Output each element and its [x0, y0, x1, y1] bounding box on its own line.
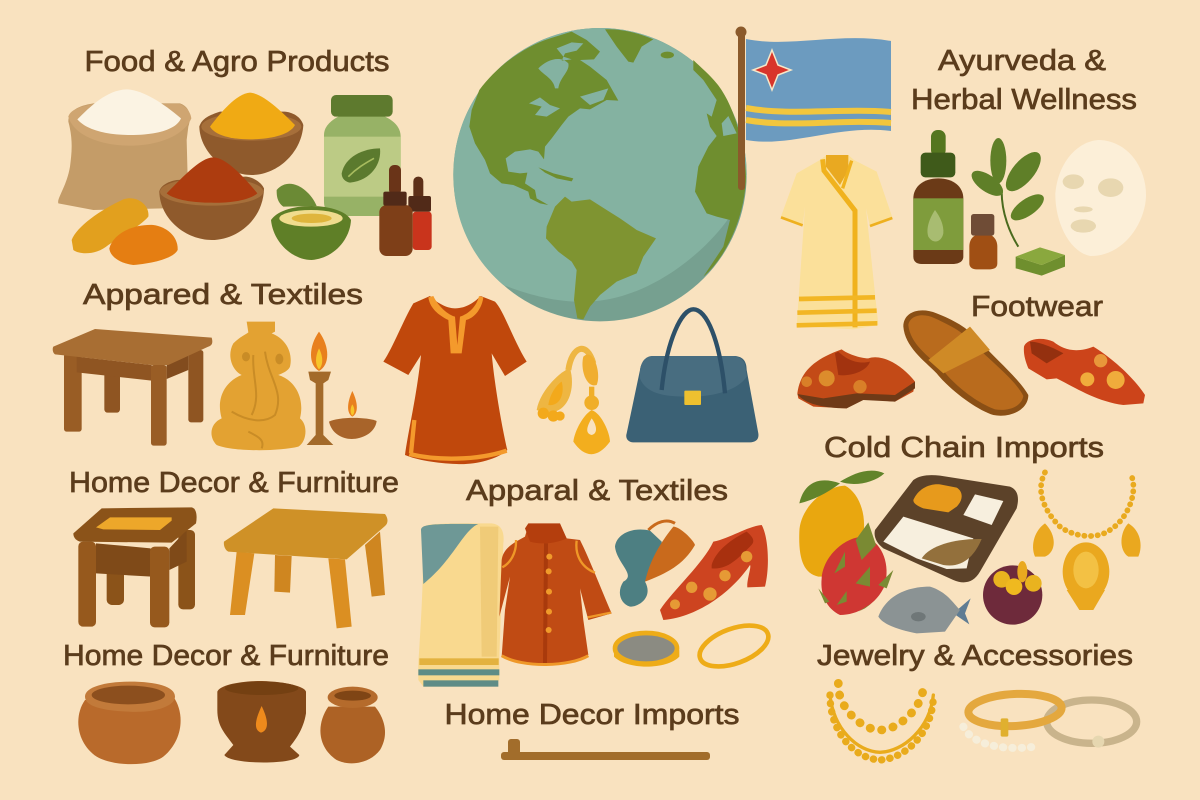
- icon: turmeric roots: [72, 198, 178, 265]
- icon: herb sprig: [968, 138, 1048, 247]
- icon: brown sandal: [903, 310, 1028, 416]
- icon: small clay jar: [320, 687, 385, 763]
- icon: folded saree: [418, 523, 504, 687]
- icon: lime half with leaf: [271, 184, 351, 260]
- Iceland: [661, 52, 674, 58]
- Europe and Africa landmass: [693, 60, 746, 277]
- icon: gold ring bangle: [694, 617, 774, 675]
- icon: mango: [799, 471, 884, 577]
- icon: red floral heels: [660, 525, 768, 620]
- heading: Apparal & Textiles: Apparal & Textiles: [466, 475, 728, 507]
- icon: bowl of turmeric: [199, 93, 303, 175]
- heading: Food & Agro Products: Food & Agro Products: [84, 46, 390, 78]
- icon: herbal jar: [324, 95, 401, 216]
- icon: gold earring: [537, 349, 610, 454]
- icon: gold necklace with pendant: [1033, 472, 1141, 610]
- icon: candle stand: [307, 332, 333, 445]
- icon: wooden table: [53, 329, 212, 446]
- icon: red kurta: [383, 296, 527, 464]
- South America landmass: [546, 197, 656, 319]
- icon: small amber bottle: [969, 214, 997, 269]
- icon: gold bead necklace: [830, 683, 933, 760]
- heading: Ayurveda & Herbal Wellness: Herbal Wellness: [911, 84, 1137, 116]
- icon: grey fish: [878, 587, 971, 633]
- heading: Footwear: Footwear: [971, 291, 1103, 323]
- heading: Ayurveda & Herbal Wellness: [911, 45, 1137, 116]
- icon: Ganesha statue: [211, 322, 305, 450]
- heading: Cold Chain Imports: Cold Chain Imports: [824, 432, 1104, 464]
- icon: blue handbag: [626, 309, 758, 442]
- heading: Ayurveda & Herbal Wellness: Ayurveda &: [938, 45, 1106, 77]
- icon: rice sack: [58, 89, 191, 210]
- icon: flag of Aruba on pole: [736, 26, 891, 190]
- icon: mangosteen: [983, 561, 1042, 625]
- icon: red slipper right: [1024, 339, 1145, 405]
- icon: herbal dropper bottle: [913, 130, 963, 264]
- heading: Home Decor Imports: Home Decor Imports: [444, 699, 740, 731]
- globe ocean highlight: [453, 28, 747, 302]
- icon: teal and orange slipper: [615, 521, 695, 607]
- icon: wooden stool: [73, 507, 197, 627]
- Greenland: [605, 29, 653, 63]
- Caribbean islands: [538, 167, 573, 181]
- icon: oil bottles: [379, 165, 432, 256]
- icon: clay pot: [78, 682, 181, 764]
- icon: gold bangle with stone: [614, 633, 679, 667]
- icon: meal tray: [875, 475, 1018, 582]
- icon: red shoe left: [797, 349, 915, 408]
- icon: gold and silver bangles: [963, 692, 1137, 748]
- globe: [453, 28, 747, 321]
- icon: face mask: [1055, 140, 1146, 256]
- icon: oil lamp: [329, 391, 377, 439]
- heading: Home Decor & Furniture (upper): Home Decor & Furniture: [69, 467, 399, 499]
- icon: light wooden table: [224, 508, 387, 628]
- icon: green soap: [1016, 247, 1065, 276]
- icon: bowl of chili powder: [159, 157, 264, 240]
- icon: dark pot with flame: [217, 681, 306, 762]
- icon: red jacket: [499, 523, 612, 665]
- icon: wooden stick: [501, 739, 710, 760]
- icon: yellow robe: [781, 155, 893, 329]
- North America landmass: [469, 32, 618, 205]
- heading: Jewelry & Accessories: Jewelry & Accessories: [817, 640, 1133, 672]
- icon: dragon fruit: [818, 522, 893, 615]
- heading: Home Decor & Furniture (lower): Home Decor & Furniture: [63, 640, 389, 672]
- heading: Appared & Textiles: Appared & Textiles: [83, 279, 363, 311]
